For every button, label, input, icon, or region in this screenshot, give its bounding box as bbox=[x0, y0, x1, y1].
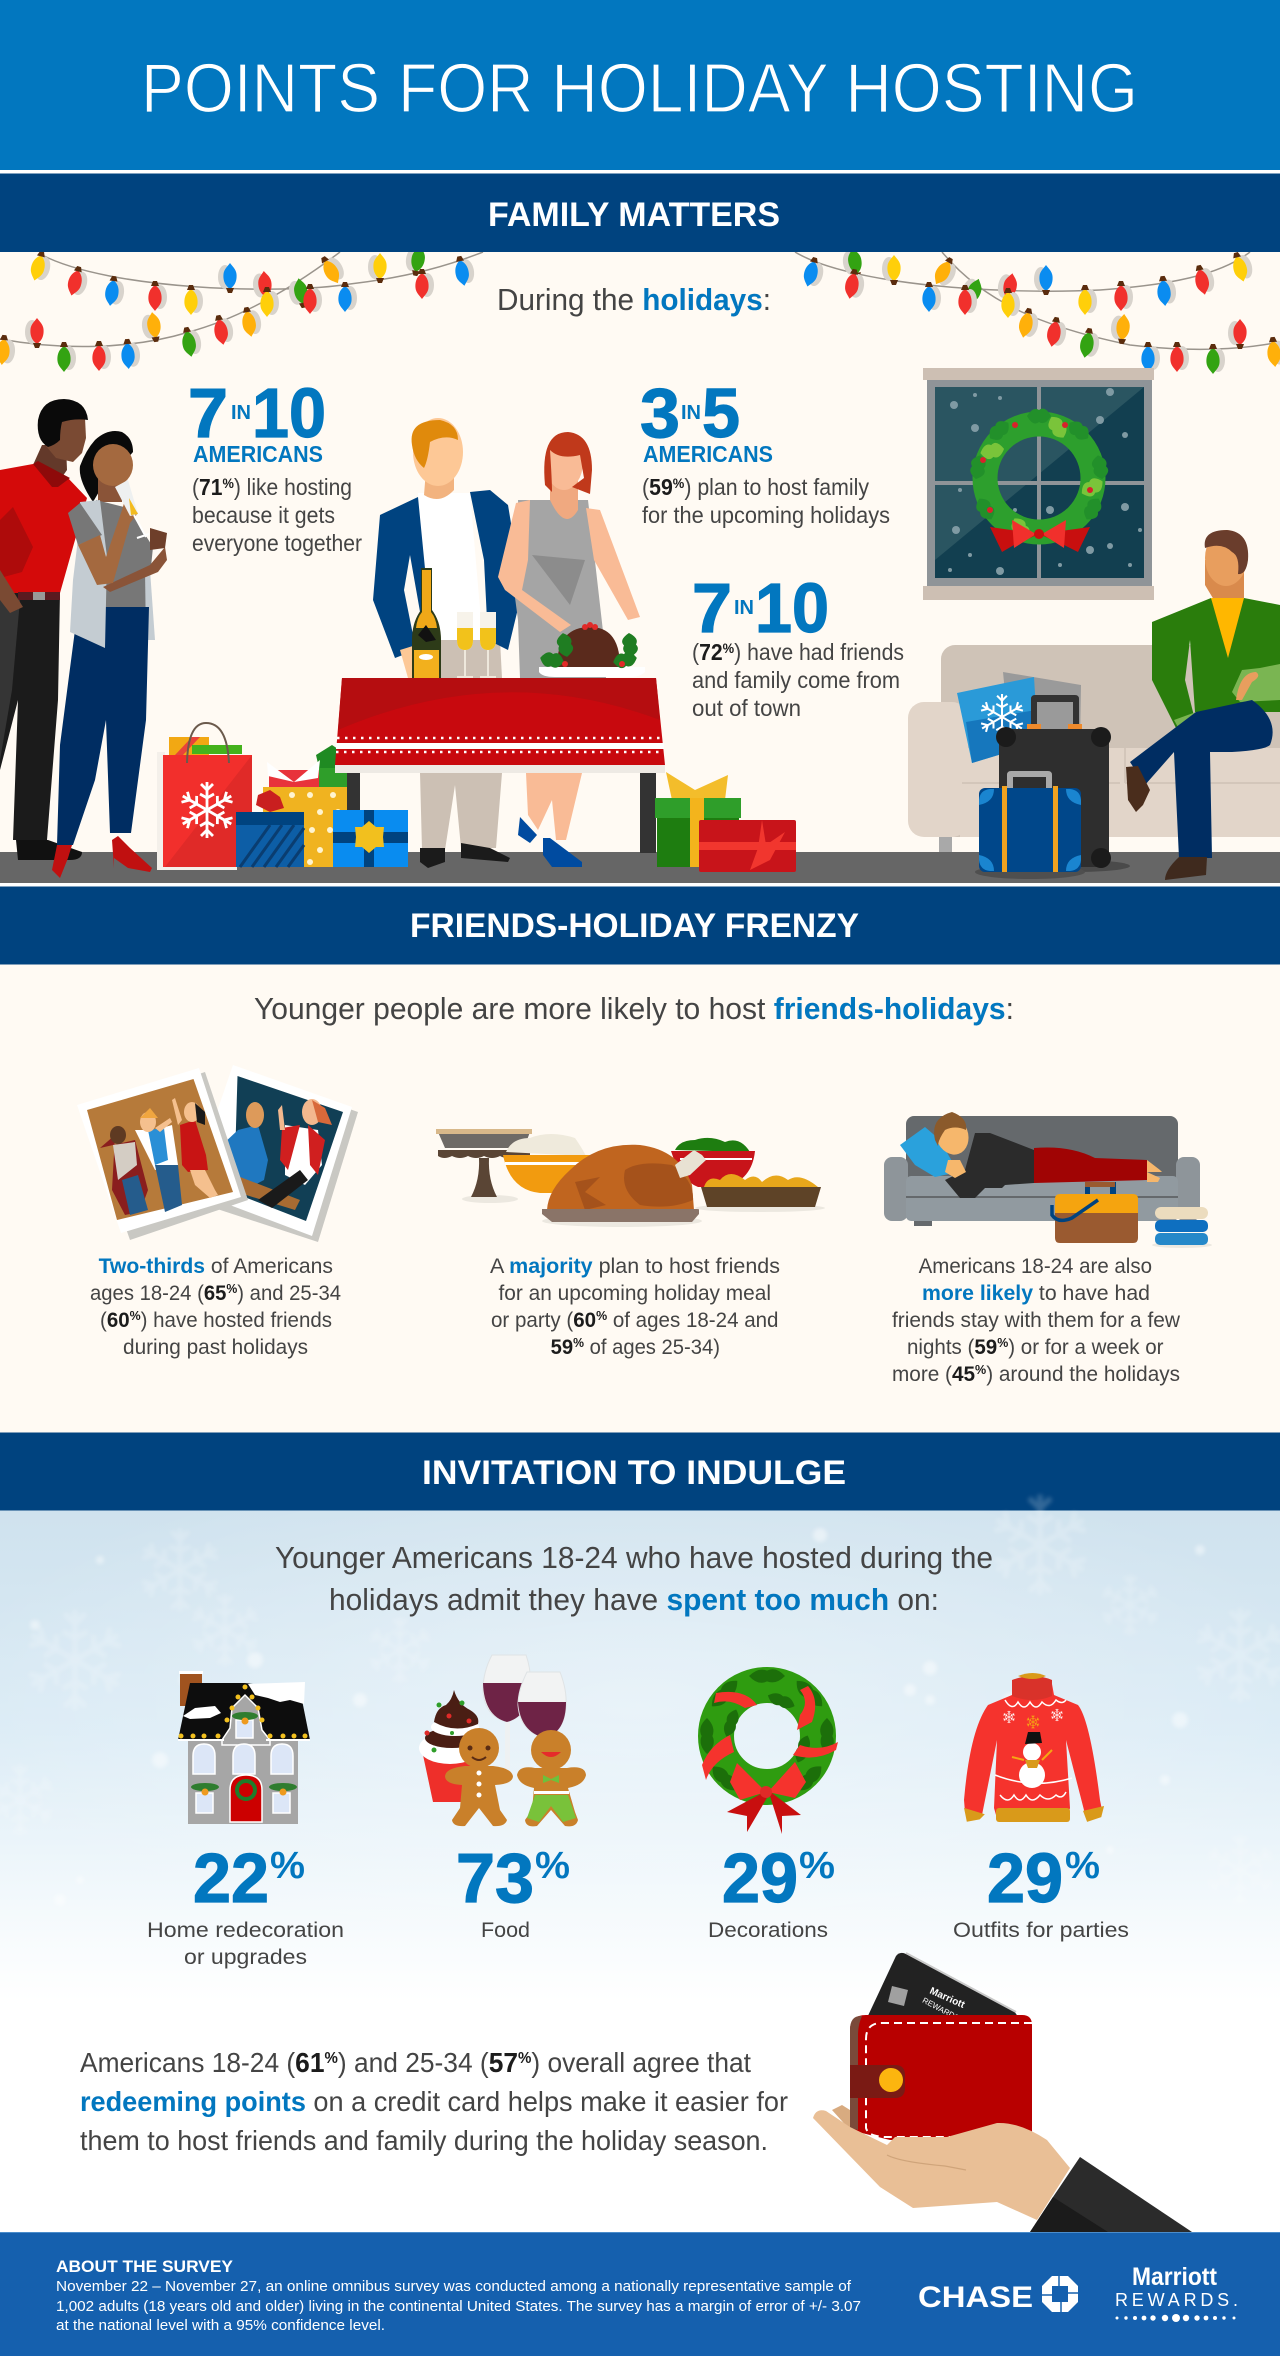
stat: 7 in 10 like hosting: AMERICANS bbox=[193, 441, 323, 467]
stat: home redecoration bbox=[147, 1671, 344, 1969]
text: redeeming points: ) overall agree that bbox=[531, 2047, 751, 2078]
text: more likely: % bbox=[997, 1335, 1009, 1350]
stat: 7 in 10 like hosting: % bbox=[222, 475, 234, 491]
woman in vest bbox=[52, 431, 167, 878]
stat: decorations: 29 bbox=[722, 1839, 798, 1917]
sleeper bbox=[900, 1111, 1162, 1198]
icon: ugly sweater bbox=[964, 1673, 1102, 1822]
stat: 7 in 10 friends from out of town: 7 bbox=[692, 569, 732, 647]
text: majority: for an upcoming holiday meal bbox=[498, 1281, 771, 1305]
stat: 7 in 10 friends from out of town: and family come from bbox=[692, 667, 900, 693]
stat: 7 in 10 friends from out of town: ) have had friends bbox=[734, 639, 904, 665]
footer band bbox=[0, 2232, 1280, 2356]
panel: friends-holiday frenzy bbox=[0, 964, 1280, 1432]
sleeve bbox=[1030, 2157, 1192, 2232]
illustration: gifts left bbox=[157, 723, 408, 870]
champagne glasses bbox=[457, 612, 496, 677]
section band: invitation to indulge: INVITATION TO INDULGE bbox=[422, 1454, 846, 1492]
blue suitcase bbox=[979, 771, 1081, 872]
about the survey: November 22 – November 27, an online omnibus survey was conducted among a nationally representative sample of bbox=[56, 2279, 852, 2295]
credit card: Marriott bbox=[928, 1986, 967, 2011]
hand bbox=[813, 2105, 1070, 2220]
black suitcase bbox=[996, 695, 1111, 868]
stat: 3 in 5 plan to host family: IN bbox=[681, 402, 701, 424]
floor bbox=[0, 852, 1280, 883]
turkey bbox=[542, 1145, 706, 1227]
stat: food: 73 bbox=[456, 1839, 534, 1917]
stat: 7 in 10 like hosting: everyone together bbox=[192, 530, 362, 556]
text: majority: of ages 18-24 and bbox=[607, 1308, 778, 1332]
stat: outfits for parties: 29 bbox=[987, 1839, 1063, 1917]
section band: family matters: FAMILY MATTERS bbox=[488, 196, 780, 234]
shopping bag bbox=[163, 723, 252, 867]
illustration: hand holding wallet and card bbox=[813, 1953, 1192, 2232]
title: POINTS FOR HOLIDAY HOSTING bbox=[141, 49, 1138, 127]
text: majority: of ages 25-34) bbox=[584, 1335, 720, 1359]
text: two-thirds: Two-thirds of Americans bbox=[99, 1254, 333, 1278]
heading: younger americans spent too much bbox=[275, 1540, 993, 1617]
text: redeeming points: 57 bbox=[489, 2047, 518, 2078]
stat: 3 in 5 plan to host family: 5 bbox=[702, 374, 740, 452]
stat: decorations: Decorations bbox=[708, 1918, 828, 1942]
stat: 3 in 5 plan to host family: (59 bbox=[642, 474, 675, 500]
text: two-thirds: during past holidays bbox=[123, 1335, 308, 1359]
text: redeeming points: % bbox=[518, 2050, 531, 2067]
logo: marriott rewards: REWARDS. bbox=[1115, 2290, 1238, 2310]
wallet bbox=[850, 2015, 1032, 2140]
text: more likely bbox=[892, 1254, 1180, 1386]
illustration: host couple at table bbox=[335, 418, 665, 868]
stat: food: % bbox=[535, 1845, 570, 1887]
text: majority bbox=[490, 1254, 780, 1359]
icon: wine, cupcake, gingerbread bbox=[419, 1655, 586, 1826]
cupcake bbox=[419, 1690, 482, 1802]
stat: home redecoration: 22 bbox=[193, 1839, 269, 1917]
photo 2 figures bbox=[222, 1099, 332, 1210]
panel: family matters bbox=[0, 244, 1280, 883]
stat: 7 in 10 like hosting: (71 bbox=[192, 474, 225, 500]
green gift bbox=[316, 745, 347, 788]
text: two-thirds: % bbox=[130, 1308, 141, 1323]
heading: younger americans spent too much: Younger Americans 18-24 who have hosted during the bbox=[275, 1540, 993, 1575]
section band: friends-holiday frenzy: FRIENDS-HOLIDAY FRENZY bbox=[410, 907, 859, 945]
wreath bow bbox=[727, 1762, 806, 1834]
text: redeeming points: Americans 18-24 (61 bbox=[80, 2047, 326, 2078]
text: more likely: more likely to have had bbox=[922, 1281, 1150, 1305]
credit card: REWARDS bbox=[921, 1996, 961, 2023]
text: two-thirds: ) and 25-34 bbox=[237, 1281, 341, 1305]
logo: marriott rewards: Marriott bbox=[1132, 2263, 1218, 2291]
photo 1 figures bbox=[100, 1098, 218, 1215]
bowl bbox=[503, 1134, 590, 1193]
stat: 7 in 10 like hosting: 7 bbox=[188, 374, 228, 452]
stat: 3 in 5 plan to host family: ) plan to host family bbox=[684, 474, 869, 500]
illustration: gifts right bbox=[655, 772, 796, 872]
text: two-thirds bbox=[90, 1254, 341, 1359]
pie stand bbox=[436, 1129, 532, 1197]
logo: chase: CHASE bbox=[918, 2281, 1033, 2314]
stat: 3 in 5 plan to host family: % bbox=[673, 475, 685, 491]
stat: decorations: % bbox=[799, 1845, 835, 1887]
about the survey: at the national level with a 95% confidence level. bbox=[56, 2318, 385, 2334]
text: more likely: friends stay with them for a few bbox=[892, 1308, 1180, 1332]
red gift with white bow bbox=[267, 760, 320, 790]
illustration: holiday food bbox=[436, 1129, 825, 1227]
text: more likely: more (45 bbox=[892, 1362, 976, 1386]
tray of rolls bbox=[695, 1174, 825, 1212]
text: redeeming points: them to host friends and family during the holiday season. bbox=[80, 2125, 768, 2156]
blue striped box bbox=[236, 790, 304, 867]
yellow polka box bbox=[263, 787, 347, 867]
illustration: sofa with luggage and seated man bbox=[908, 530, 1280, 880]
logo: chase bbox=[918, 2276, 1078, 2314]
glass bbox=[115, 480, 149, 538]
stat: 7 in 10 friends from out of town: % bbox=[723, 640, 735, 656]
illustration: couple with drinks bbox=[0, 399, 167, 878]
red gift bbox=[699, 820, 796, 872]
text: more likely: ) or for a week or bbox=[1008, 1335, 1164, 1359]
stat: decorations bbox=[700, 1669, 838, 1942]
about the survey: 1,002 adults (18 years old and older) living in the continental United States. The survey has a margin of error of +/- 3.07 bbox=[56, 2299, 861, 2315]
about the survey: ABOUT THE SURVEY bbox=[56, 2257, 234, 2276]
stat: 7 in 10 like hosting bbox=[188, 374, 362, 556]
icon: house bbox=[178, 1671, 310, 1824]
champagne bottle bbox=[412, 568, 441, 678]
text: two-thirds: ) have hosted friends bbox=[141, 1308, 332, 1332]
stat: home redecoration: % bbox=[270, 1845, 305, 1887]
stat: 7 in 10 like hosting: because it gets bbox=[192, 502, 335, 528]
salad bowl bbox=[671, 1138, 755, 1187]
stat: outfits for parties: % bbox=[1065, 1845, 1100, 1887]
stat: food bbox=[419, 1655, 586, 1942]
heading: during the holidays: During the holidays: bbox=[497, 282, 771, 317]
icon: wreath bbox=[700, 1669, 838, 1834]
section band: family matters bbox=[0, 174, 1280, 252]
stat: 7 in 10 friends from out of town: IN bbox=[734, 597, 754, 619]
heading: younger americans spent too much: holidays admit they have spent too much on: bbox=[329, 1582, 939, 1617]
stat: 7 in 10 like hosting: 10 bbox=[252, 374, 326, 452]
stat: home redecoration: Home redecoration bbox=[147, 1918, 344, 1942]
stat: 7 in 10 like hosting: ) like hosting bbox=[234, 474, 352, 500]
stat: 3 in 5 plan to host family: for the upcoming holidays bbox=[642, 502, 890, 528]
stat: home redecoration: or upgrades bbox=[184, 1945, 307, 1969]
heading: younger people: Younger people are more likely to host friends-holidays: bbox=[254, 991, 1014, 1026]
text: two-thirds: ages 18-24 (65 bbox=[90, 1281, 228, 1305]
wreath bow bbox=[990, 520, 1090, 552]
string lights right bbox=[795, 247, 1280, 374]
text: two-thirds: % bbox=[226, 1281, 238, 1296]
stat: 7 in 10 friends from out of town bbox=[692, 569, 904, 721]
text: majority: 59 bbox=[551, 1335, 573, 1359]
table bbox=[335, 678, 665, 853]
host man bbox=[373, 418, 522, 868]
string lights left bbox=[0, 244, 483, 372]
host woman bbox=[498, 432, 640, 867]
stat: 3 in 5 plan to host family: AMERICANS bbox=[643, 441, 773, 467]
text: majority: A majority plan to host friends bbox=[490, 1254, 780, 1278]
text: more likely: ) around the holidays bbox=[986, 1362, 1180, 1386]
section band: invitation to indulge bbox=[0, 1432, 1280, 1510]
stat: 7 in 10 friends from out of town: 10 bbox=[755, 569, 829, 647]
credit card bbox=[866, 1953, 1018, 2023]
light blue box bbox=[333, 810, 408, 867]
stat: 7 in 10 like hosting: IN bbox=[231, 402, 251, 424]
illustration: photos bbox=[77, 1065, 358, 1242]
seated man bbox=[1126, 530, 1280, 880]
illustration: guest sleeping on sofa bbox=[884, 1111, 1212, 1248]
stat: food: Food bbox=[481, 1918, 530, 1942]
duffel bag bbox=[1052, 1182, 1138, 1243]
pudding bbox=[539, 622, 645, 677]
text: redeeming points: ) and 25-34 ( bbox=[338, 2047, 489, 2078]
stat: 3 in 5 plan to host family: 3 bbox=[640, 374, 680, 452]
text: redeeming points bbox=[80, 2047, 788, 2156]
stat: 7 in 10 friends from out of town: out of town bbox=[692, 695, 801, 721]
logo: marriott rewards bbox=[1115, 2263, 1238, 2322]
stat: outfits for parties: Outfits for parties bbox=[953, 1918, 1129, 1942]
stat: 7 in 10 friends from out of town: (72 bbox=[692, 639, 725, 665]
blankets bbox=[1152, 1207, 1212, 1248]
stat: 3 in 5 plan to host family bbox=[640, 374, 890, 528]
panel: invitation to indulge background bbox=[0, 1495, 1280, 2000]
text: two-thirds: (60 bbox=[100, 1308, 131, 1332]
about the survey bbox=[56, 2257, 861, 2334]
pillows bbox=[957, 672, 1081, 763]
stat: outfits for parties bbox=[953, 1673, 1129, 1942]
title banner bbox=[0, 0, 1280, 170]
text: majority: % bbox=[573, 1335, 584, 1350]
man in red shirt bbox=[0, 399, 88, 860]
text: redeeming points: redeeming points on a credit card helps make it easier for bbox=[80, 2086, 788, 2117]
section band: friends-holiday frenzy bbox=[0, 886, 1280, 964]
text: majority: % bbox=[596, 1308, 608, 1323]
text: redeeming points: % bbox=[324, 2050, 338, 2067]
text: more likely: % bbox=[975, 1362, 987, 1377]
text: majority: or party (60 bbox=[491, 1308, 597, 1332]
text: more likely: nights (59 bbox=[907, 1335, 998, 1359]
text: more likely: Americans 18-24 are also bbox=[919, 1254, 1152, 1278]
illustration: window with wreath bbox=[923, 368, 1154, 600]
